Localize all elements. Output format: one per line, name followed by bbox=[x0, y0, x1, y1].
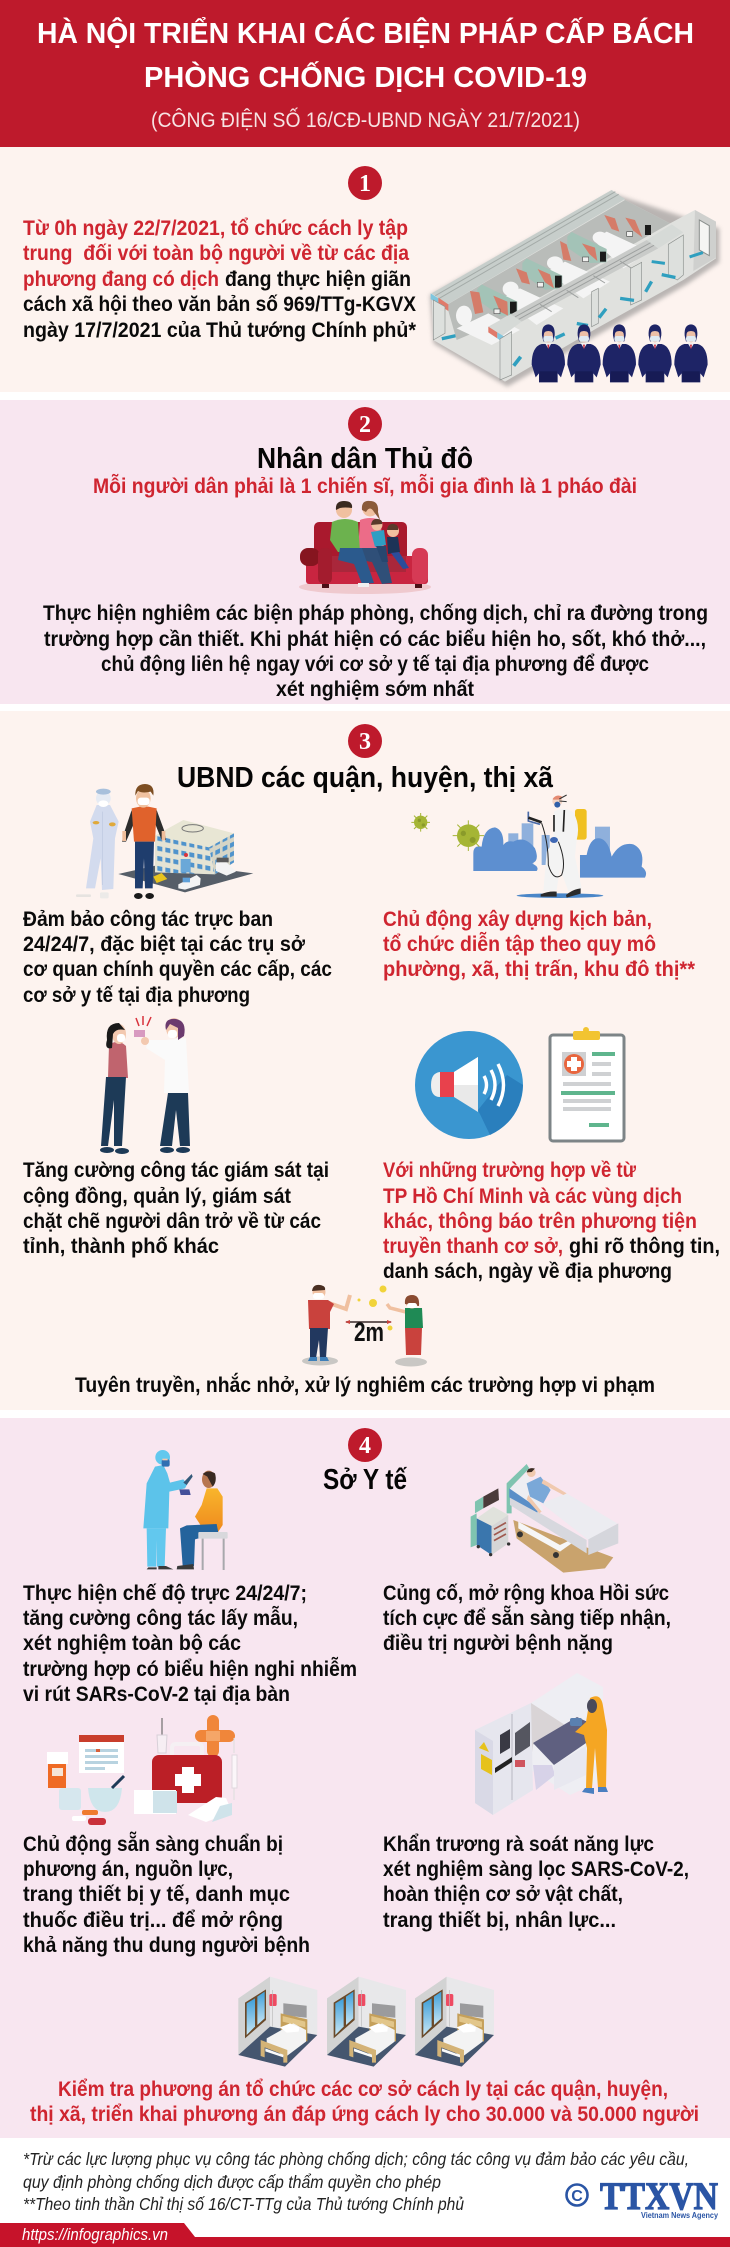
text block: isolation order: cách xã hội theo văn bản số 969/TTg-KGVX bbox=[23, 293, 416, 316]
logo: TTXVN: Vietnam News Agency bbox=[641, 2211, 718, 2220]
text block: isolation order: ngày 17/7/2021 của Thủ tướng Chính phủ* bbox=[23, 319, 417, 342]
text: monitoring: chặt chẽ người dân trở về từ các bbox=[23, 1210, 321, 1233]
illustration: three isolation rooms bbox=[238, 1977, 494, 2067]
text: monitoring: Tăng cường công tác giám sát tại bbox=[23, 1159, 329, 1182]
text: drills: phường, xã, thị trấn, khu đô thị** bbox=[383, 958, 696, 981]
text: resources: Chủ động sẵn sàng chuẩn bị bbox=[23, 1832, 283, 1856]
text: resources: thuốc điều trị... để mở rộng bbox=[23, 1909, 283, 1932]
text: resources: khả năng thu dung người bệnh bbox=[23, 1934, 310, 1957]
illustration: worker disinfecting the city bbox=[411, 795, 646, 898]
title line 1: HÀ NỘI TRIỂN KHAI CÁC BIỆN PHÁP CẤP BÁCH bbox=[37, 16, 694, 50]
text: notifications: khác, thông báo trên phương tiện bbox=[383, 1210, 697, 1233]
illustration: ICU bed bbox=[471, 1464, 618, 1573]
text: duty: 24/24/7, đặc biệt tại các trụ sở bbox=[23, 933, 305, 956]
text block: isolation order: phương đang có dịch bbox=[23, 268, 219, 291]
text: duty: cơ sở y tế tại địa phương bbox=[23, 984, 250, 1007]
badge 3: 3 bbox=[359, 729, 371, 755]
text: lab capacity bbox=[383, 1833, 689, 1932]
text: monitoring bbox=[23, 1159, 329, 1258]
footnotes: quy định phòng chống dịch được cấp thẩm quyền cho phép bbox=[23, 2172, 441, 2192]
body text: chủ động liên hệ ngay với cơ sở y tế tại địa phương để được bbox=[101, 653, 649, 676]
text: testing: Thực hiện chế độ trực 24/24/7; bbox=[23, 1582, 307, 1605]
text: resources: trang thiết bị y tế, danh mục bbox=[23, 1883, 290, 1906]
text block: isolation order bbox=[23, 217, 417, 342]
text: notifications: truyền thanh cơ sở, bbox=[383, 1235, 563, 1258]
illustration: family on sofa bbox=[299, 501, 431, 594]
illustration: quarantine facility and guards bbox=[430, 190, 719, 387]
badge 4: 4 bbox=[359, 1433, 371, 1459]
badge 4 bbox=[348, 1428, 382, 1462]
text: resources bbox=[23, 1832, 310, 1957]
badge 1 bbox=[348, 166, 382, 200]
text: lab capacity: trang thiết bị, nhân lực... bbox=[383, 1909, 616, 1932]
illustration: loudspeaker bbox=[415, 1031, 523, 1139]
text: notifications: Với những trường hợp về từ bbox=[383, 1159, 637, 1182]
text: testing: tăng cường công tác lấy mẫu, bbox=[23, 1606, 298, 1630]
website: https://infographics.vn bbox=[22, 2225, 168, 2244]
text: enforcement: Tuyên truyền, nhắc nhở, xử lý nghiêm các trường hợp vi phạm bbox=[75, 1373, 655, 1397]
body text: xét nghiệm sớm nhất bbox=[276, 678, 474, 701]
panel: section 3 bbox=[0, 711, 730, 1410]
text: drills: tổ chức diễn tập theo quy mô bbox=[383, 932, 656, 956]
panel: section 4 bbox=[0, 1418, 730, 2138]
text: monitoring: cộng đồng, quản lý, giám sát bbox=[23, 1185, 291, 1208]
footnotes bbox=[23, 2149, 689, 2214]
title line 2: PHÒNG CHỐNG DỊCH COVID-19 bbox=[144, 60, 587, 94]
subtitle: (CÔNG ĐIỆN SỐ 16/CĐ-UBND NGÀY 21/7/2021) bbox=[151, 108, 580, 132]
text: testing: xét nghiệm toàn bộ các bbox=[23, 1632, 241, 1655]
text: testing: trường hợp có biểu hiện nghi nhiễm bbox=[23, 1657, 357, 1681]
child boy bbox=[387, 524, 409, 569]
bottom bar bbox=[0, 2223, 730, 2247]
text: intensive care: tích cực để sẵn sàng tiếp nhận, bbox=[383, 1606, 671, 1630]
child girl bbox=[371, 519, 388, 562]
badge 2: 2 bbox=[359, 412, 371, 438]
heading: UBND các quận, huyện, thị xã bbox=[177, 762, 554, 794]
illustration: swab test bbox=[143, 1450, 228, 1570]
illustration: two metre distancing bbox=[302, 1285, 427, 1366]
illustration: medic, officer and hospital bbox=[76, 784, 253, 899]
panel: section 1 bbox=[0, 147, 730, 392]
illustration: clipboard bbox=[550, 1027, 624, 1141]
text block: isolation order: Từ 0h ngày 22/7/2021, tổ chức cách ly tập bbox=[23, 217, 408, 240]
logo: TTXVN bbox=[566, 2175, 718, 2220]
text: notifications: danh sách, ngày về địa phương bbox=[383, 1260, 672, 1283]
text: drills bbox=[383, 908, 696, 981]
illustration: temperature check bbox=[100, 1016, 190, 1154]
text block: isolation order: trung đối với toàn bộ người về từ các địa bbox=[23, 242, 409, 265]
text: monitoring: tỉnh, thành phố khác bbox=[23, 1235, 219, 1258]
header banner bbox=[0, 0, 730, 147]
logo: TTXVN: C bbox=[571, 2188, 583, 2205]
text: lab capacity: Khẩn trương rà soát năng lực bbox=[383, 1833, 654, 1856]
man bbox=[330, 501, 374, 587]
text: isolation capacity: Kiểm tra phương án tổ chức các cơ sở cách ly tại các quận, huyện, bbox=[58, 2078, 668, 2101]
heading: Nhân dân Thủ đô bbox=[257, 443, 473, 475]
heading: Sở Y tế bbox=[323, 1464, 408, 1496]
text block: isolation order: đang thực hiện giãn bbox=[225, 268, 411, 291]
text: drills: Chủ động xây dựng kịch bản, bbox=[383, 908, 652, 931]
panel: section 2 bbox=[0, 400, 730, 704]
text: intensive care: điều trị người bệnh nặng bbox=[383, 1632, 613, 1655]
text: notifications: ghi rõ thông tin, bbox=[569, 1235, 720, 1258]
badge 2 bbox=[348, 407, 382, 441]
illustration: medical supplies bbox=[47, 1718, 237, 1825]
slogan: Mỗi người dân phải là 1 chiến sĩ, mỗi gia đình là 1 pháo đài bbox=[93, 474, 637, 498]
text: isolation capacity bbox=[30, 2078, 699, 2126]
body text bbox=[43, 602, 708, 701]
footer bbox=[0, 2138, 730, 2247]
text: notifications bbox=[383, 1159, 720, 1283]
badge 3 bbox=[348, 724, 382, 758]
text: duty: cơ quan chính quyền các cấp, các bbox=[23, 958, 332, 981]
text: lab capacity: xét nghiệm sàng lọc SARS-CoV-2, bbox=[383, 1858, 689, 1881]
text: testing bbox=[23, 1582, 357, 1706]
text: duty bbox=[23, 908, 332, 1007]
badge 1: 1 bbox=[359, 171, 371, 197]
text: intensive care bbox=[383, 1582, 671, 1655]
footnotes: **Theo tinh thần Chỉ thị số 16/CT-TTg của Thủ tướng Chính phủ bbox=[23, 2194, 464, 2214]
woman bbox=[358, 501, 392, 584]
illustration: laboratory equipment bbox=[475, 1673, 608, 1815]
text: intensive care: Củng cố, mở rộng khoa Hồi sức bbox=[383, 1582, 669, 1605]
label: 2m: 2m bbox=[354, 1317, 384, 1347]
text: resources: phương án, nguồn lực, bbox=[23, 1858, 233, 1881]
text: duty: Đảm bảo công tác trực ban bbox=[23, 908, 273, 931]
text: notifications: TP Hồ Chí Minh và các vùng dịch bbox=[383, 1185, 682, 1208]
text: testing: vi rút SARs-CoV-2 tại địa bàn bbox=[23, 1683, 290, 1706]
text: lab capacity: hoàn thiện cơ sở vật chất, bbox=[383, 1883, 623, 1906]
